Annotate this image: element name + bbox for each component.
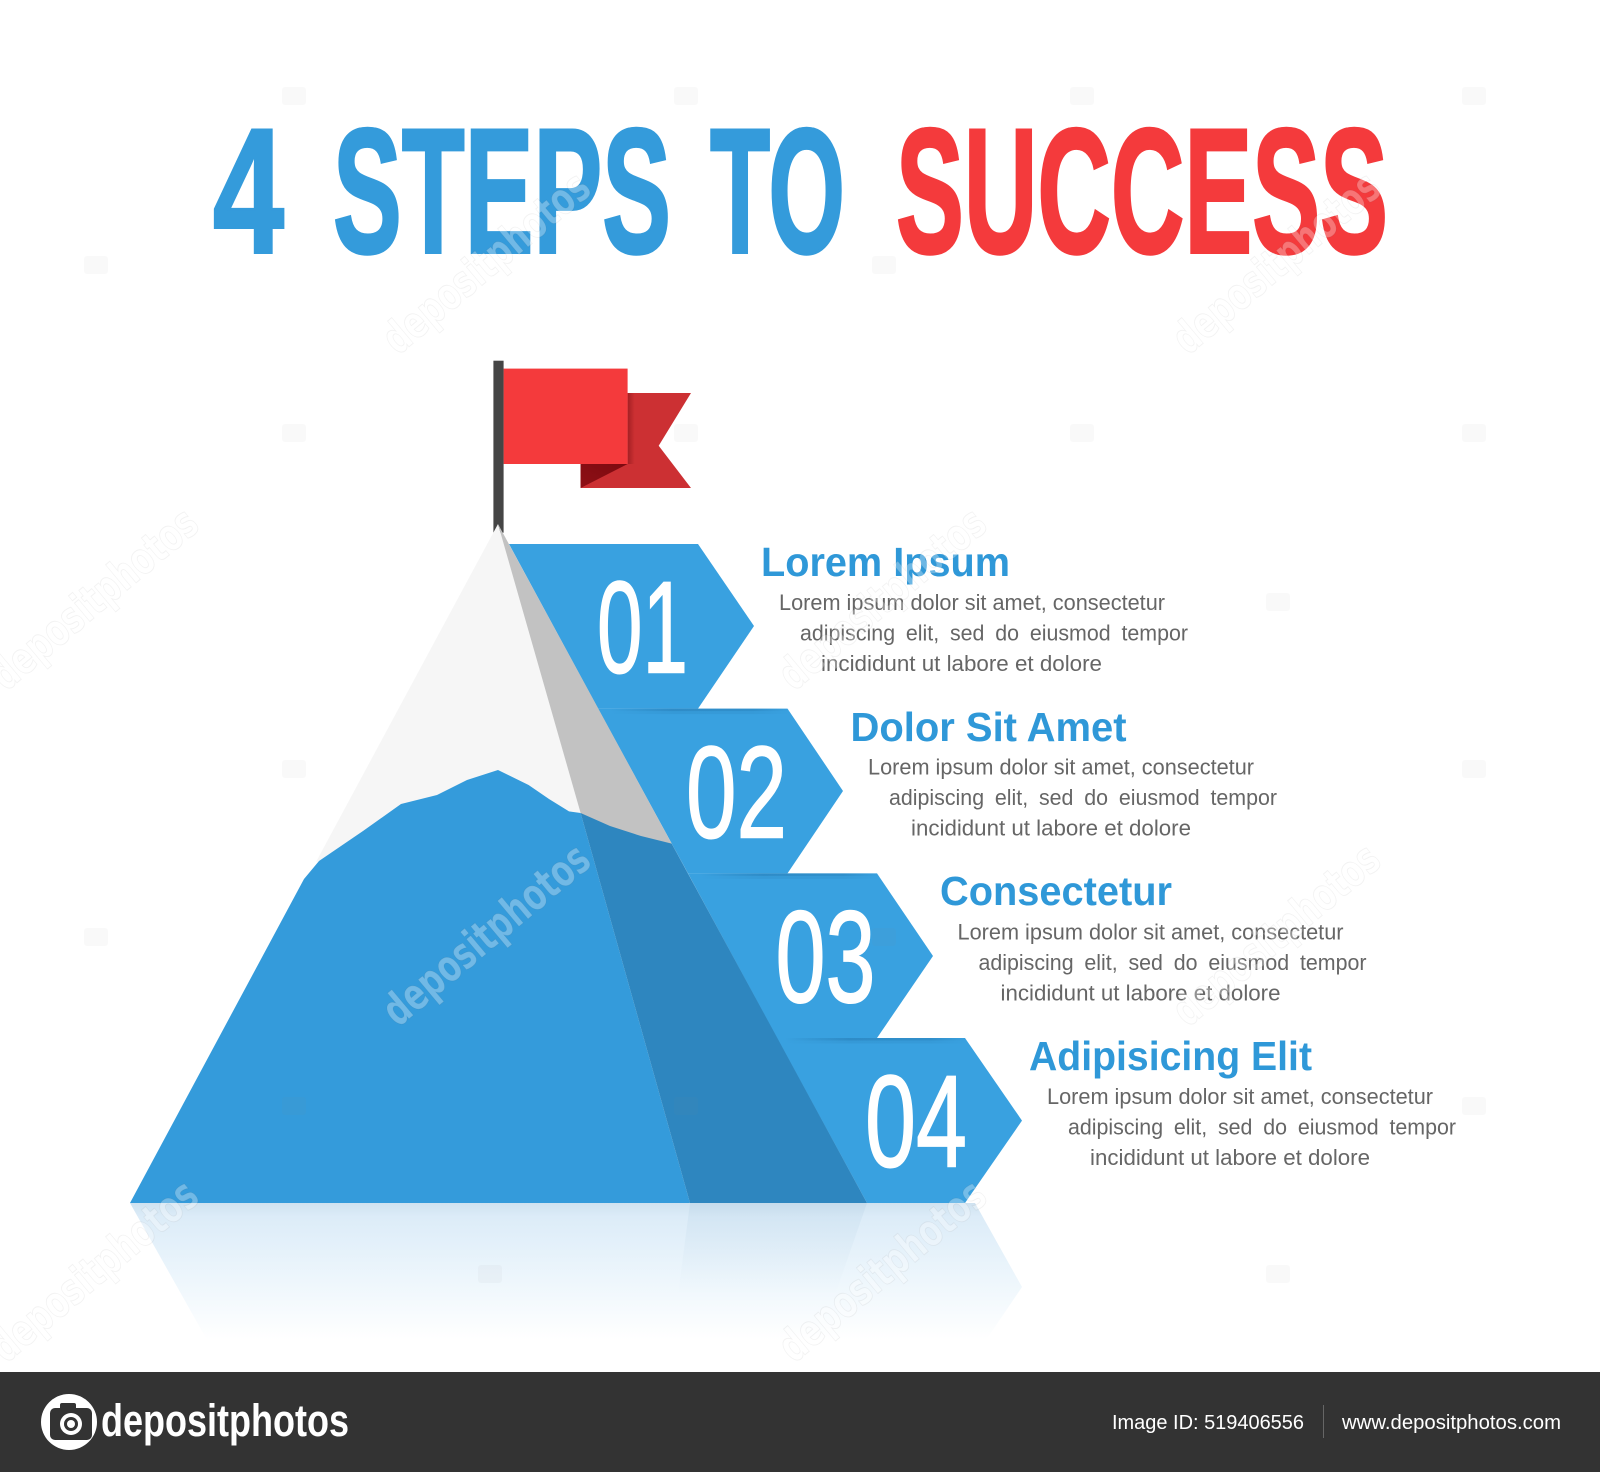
step 1 text <box>761 539 1188 676</box>
step 2 text: incididunt ut labore et dolore <box>911 816 1191 841</box>
step 4 text <box>1029 1033 1456 1170</box>
step 2 text: adipiscing elit, sed do eiusmod tempor <box>889 785 1277 810</box>
step number 04: 04 <box>865 1048 967 1194</box>
snow cap <box>316 524 581 862</box>
step 3 text: incididunt ut labore et dolore <box>1000 980 1280 1005</box>
step 3 heading: Consectetur <box>940 868 1172 914</box>
watermarks: depositphotos <box>1162 833 1390 1036</box>
logo wordmark: depositphotos <box>101 1395 349 1446</box>
watermarks: depositphotos <box>768 1169 996 1372</box>
title <box>213 92 1388 290</box>
watermarks: depositphotos <box>372 161 600 364</box>
title: STEPS <box>333 92 671 290</box>
step 3 text: Lorem ipsum dolor sit amet, consectetur <box>958 919 1344 944</box>
step 1 text: incididunt ut labore et dolore <box>821 651 1102 676</box>
flag <box>493 361 691 533</box>
step 4 arrow <box>777 1038 1022 1203</box>
step 4 text: adipiscing elit, sed do eiusmod tempor <box>1068 1115 1456 1140</box>
step 2 text <box>850 704 1277 841</box>
step 2 text: Lorem ipsum dolor sit amet, consectetur <box>868 755 1254 780</box>
step 1 arrow <box>509 544 754 709</box>
title: TO <box>710 92 845 290</box>
step 4 text: Lorem ipsum dolor sit amet, consectetur <box>1047 1084 1433 1109</box>
footer bar <box>0 1372 1600 1472</box>
step 2 heading: Dolor Sit Amet <box>850 704 1127 750</box>
step 1 heading: Lorem Ipsum <box>761 539 1010 585</box>
mountain <box>130 524 867 1203</box>
mountain reflection <box>130 1203 1022 1340</box>
shaded snow <box>498 524 672 844</box>
title: 4 <box>213 92 284 290</box>
step 3 text <box>940 868 1366 1005</box>
image id: Image ID: 519406556 <box>1112 1412 1304 1434</box>
website url: www.depositphotos.com <box>1341 1412 1561 1434</box>
step number 02: 02 <box>686 718 787 866</box>
step 2 arrow <box>598 709 843 873</box>
step 4 text: incididunt ut labore et dolore <box>1090 1145 1370 1170</box>
step number 01: 01 <box>597 554 688 700</box>
watermarks: depositphotos <box>1162 161 1390 364</box>
shaded side <box>581 813 867 1203</box>
step 3 arrow <box>688 873 933 1038</box>
step 1 text: adipiscing elit, sed do eiusmod tempor <box>800 620 1188 646</box>
watermarks: depositphotos <box>372 833 600 1036</box>
step 4 heading: Adipisicing Elit <box>1029 1033 1312 1079</box>
watermarks: depositphotos <box>768 497 996 700</box>
step 1 text: Lorem ipsum dolor sit amet, consectetur <box>779 590 1165 615</box>
step 3 text: adipiscing elit, sed do eiusmod tempor <box>978 950 1366 975</box>
step number 03: 03 <box>776 883 876 1030</box>
blue body <box>130 770 690 1203</box>
icon: camera logo <box>41 1394 97 1450</box>
